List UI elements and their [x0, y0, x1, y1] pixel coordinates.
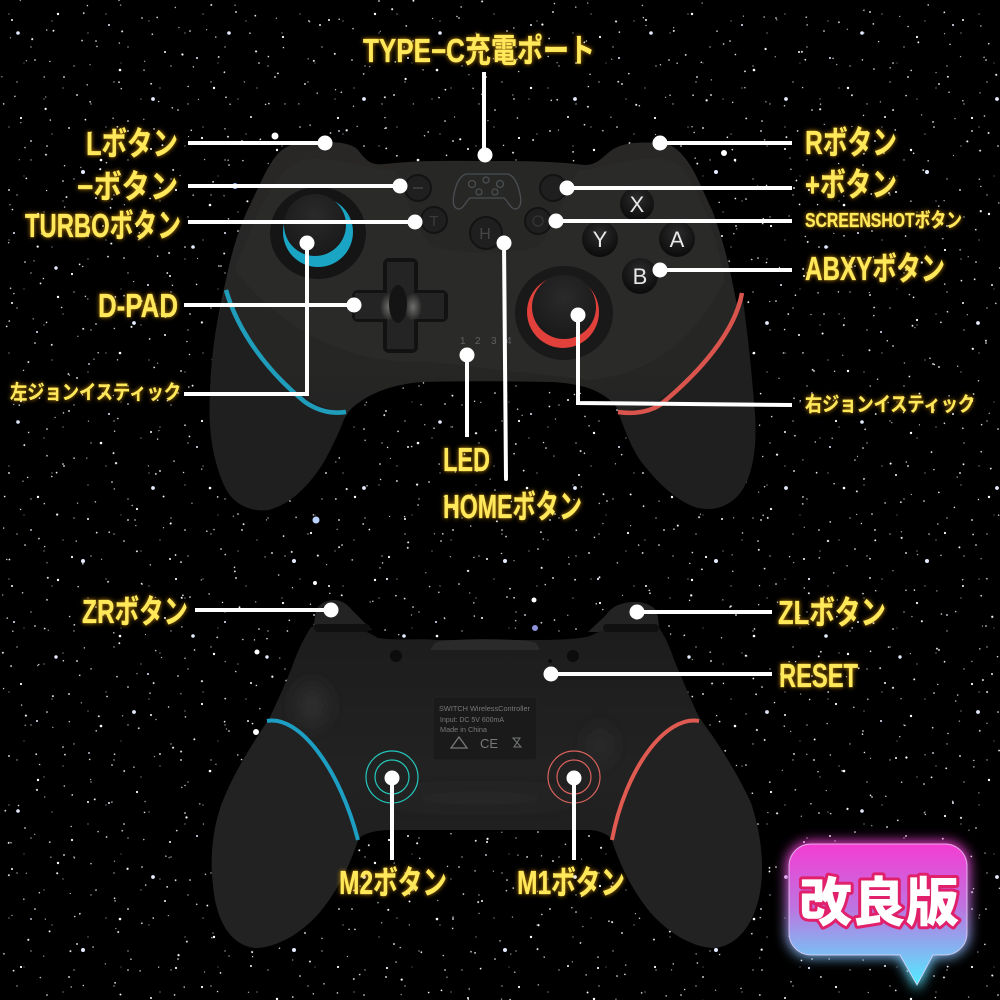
label: R button: Rボタン — [805, 124, 897, 161]
label: ABXY buttons: ABXYボタン — [805, 250, 945, 287]
center panel — [395, 164, 580, 252]
label plate — [433, 697, 537, 760]
small buttons: minus, turbo, home, plus, screenshot — [405, 175, 566, 249]
label: plus button: +ボタン — [805, 166, 897, 203]
LED numbers — [460, 336, 512, 347]
LED numbers: 1 — [460, 336, 466, 347]
label: home button: HOMEボタン — [443, 488, 582, 525]
M1 button rings — [548, 751, 600, 803]
left trigger — [313, 600, 372, 630]
label: M1 button: M1ボタン — [517, 864, 625, 901]
badge: improved version speech bubble — [789, 844, 967, 985]
back top bar — [430, 639, 540, 650]
label: type-c port: TYPE−C充電ポート — [363, 32, 595, 69]
small buttons: minus, turbo, home, plus, screenshot: T — [429, 213, 439, 230]
blue back line — [267, 721, 358, 840]
ABXY buttons: Y — [593, 227, 608, 252]
label: reset: RESET — [779, 657, 858, 694]
label: turbo button: TURBOボタン — [25, 207, 181, 244]
right grip back — [612, 721, 762, 948]
right trigger — [588, 602, 660, 632]
right stick — [515, 266, 613, 360]
label: minus button: −ボタン — [77, 168, 178, 205]
LED numbers: 3 — [491, 336, 497, 347]
ABXY buttons: X — [630, 192, 645, 217]
red back line — [612, 721, 699, 840]
label plate: Input: DC 5V 600mA — [440, 715, 504, 724]
small buttons: minus, turbo, home, plus, screenshot: H — [479, 226, 491, 243]
grip right — [618, 293, 756, 509]
ABXY buttons: B — [633, 264, 647, 289]
screw holes — [390, 650, 579, 663]
label plate: Made in China — [440, 725, 488, 734]
grip left — [210, 292, 346, 510]
back bumpers — [314, 624, 659, 632]
label plate: SWITCH WirelessController — [439, 704, 530, 713]
left stick — [270, 187, 366, 279]
label: ZL button: ZLボタン — [778, 594, 886, 631]
d-pad — [352, 258, 448, 353]
label: screenshot button: SCREENSHOTボタン — [805, 209, 962, 232]
icon: controller logo — [453, 174, 521, 209]
controller front view — [210, 142, 756, 510]
label: left stick: 左ジョンイスティック — [10, 381, 181, 404]
LED numbers: 4 — [506, 336, 512, 347]
badge: improved version speech bubble: 改良版 — [799, 861, 959, 937]
controller back view — [212, 600, 762, 948]
ABXY buttons: A — [670, 227, 685, 252]
back shoulder highlights — [298, 685, 612, 804]
red grip line — [618, 293, 742, 413]
M2 button rings — [366, 751, 418, 803]
label: M2 button: M2ボタン — [339, 864, 447, 901]
back body shell — [212, 625, 762, 948]
blue grip line — [226, 290, 346, 413]
faceplate — [235, 159, 725, 380]
label: d-pad: D-PAD — [98, 287, 178, 324]
leader lines and dots — [184, 72, 792, 860]
ABXY buttons — [582, 187, 695, 294]
label: right stick: 右ジョンイスティック — [805, 393, 975, 416]
label: LED: LED — [443, 441, 490, 478]
LED numbers: 2 — [475, 336, 481, 347]
left grip back — [212, 721, 357, 948]
label: ZR button: ZRボタン — [82, 593, 188, 630]
label: L button: Lボタン — [86, 125, 178, 162]
label plate: CE — [480, 736, 498, 751]
front body shell — [210, 142, 756, 510]
